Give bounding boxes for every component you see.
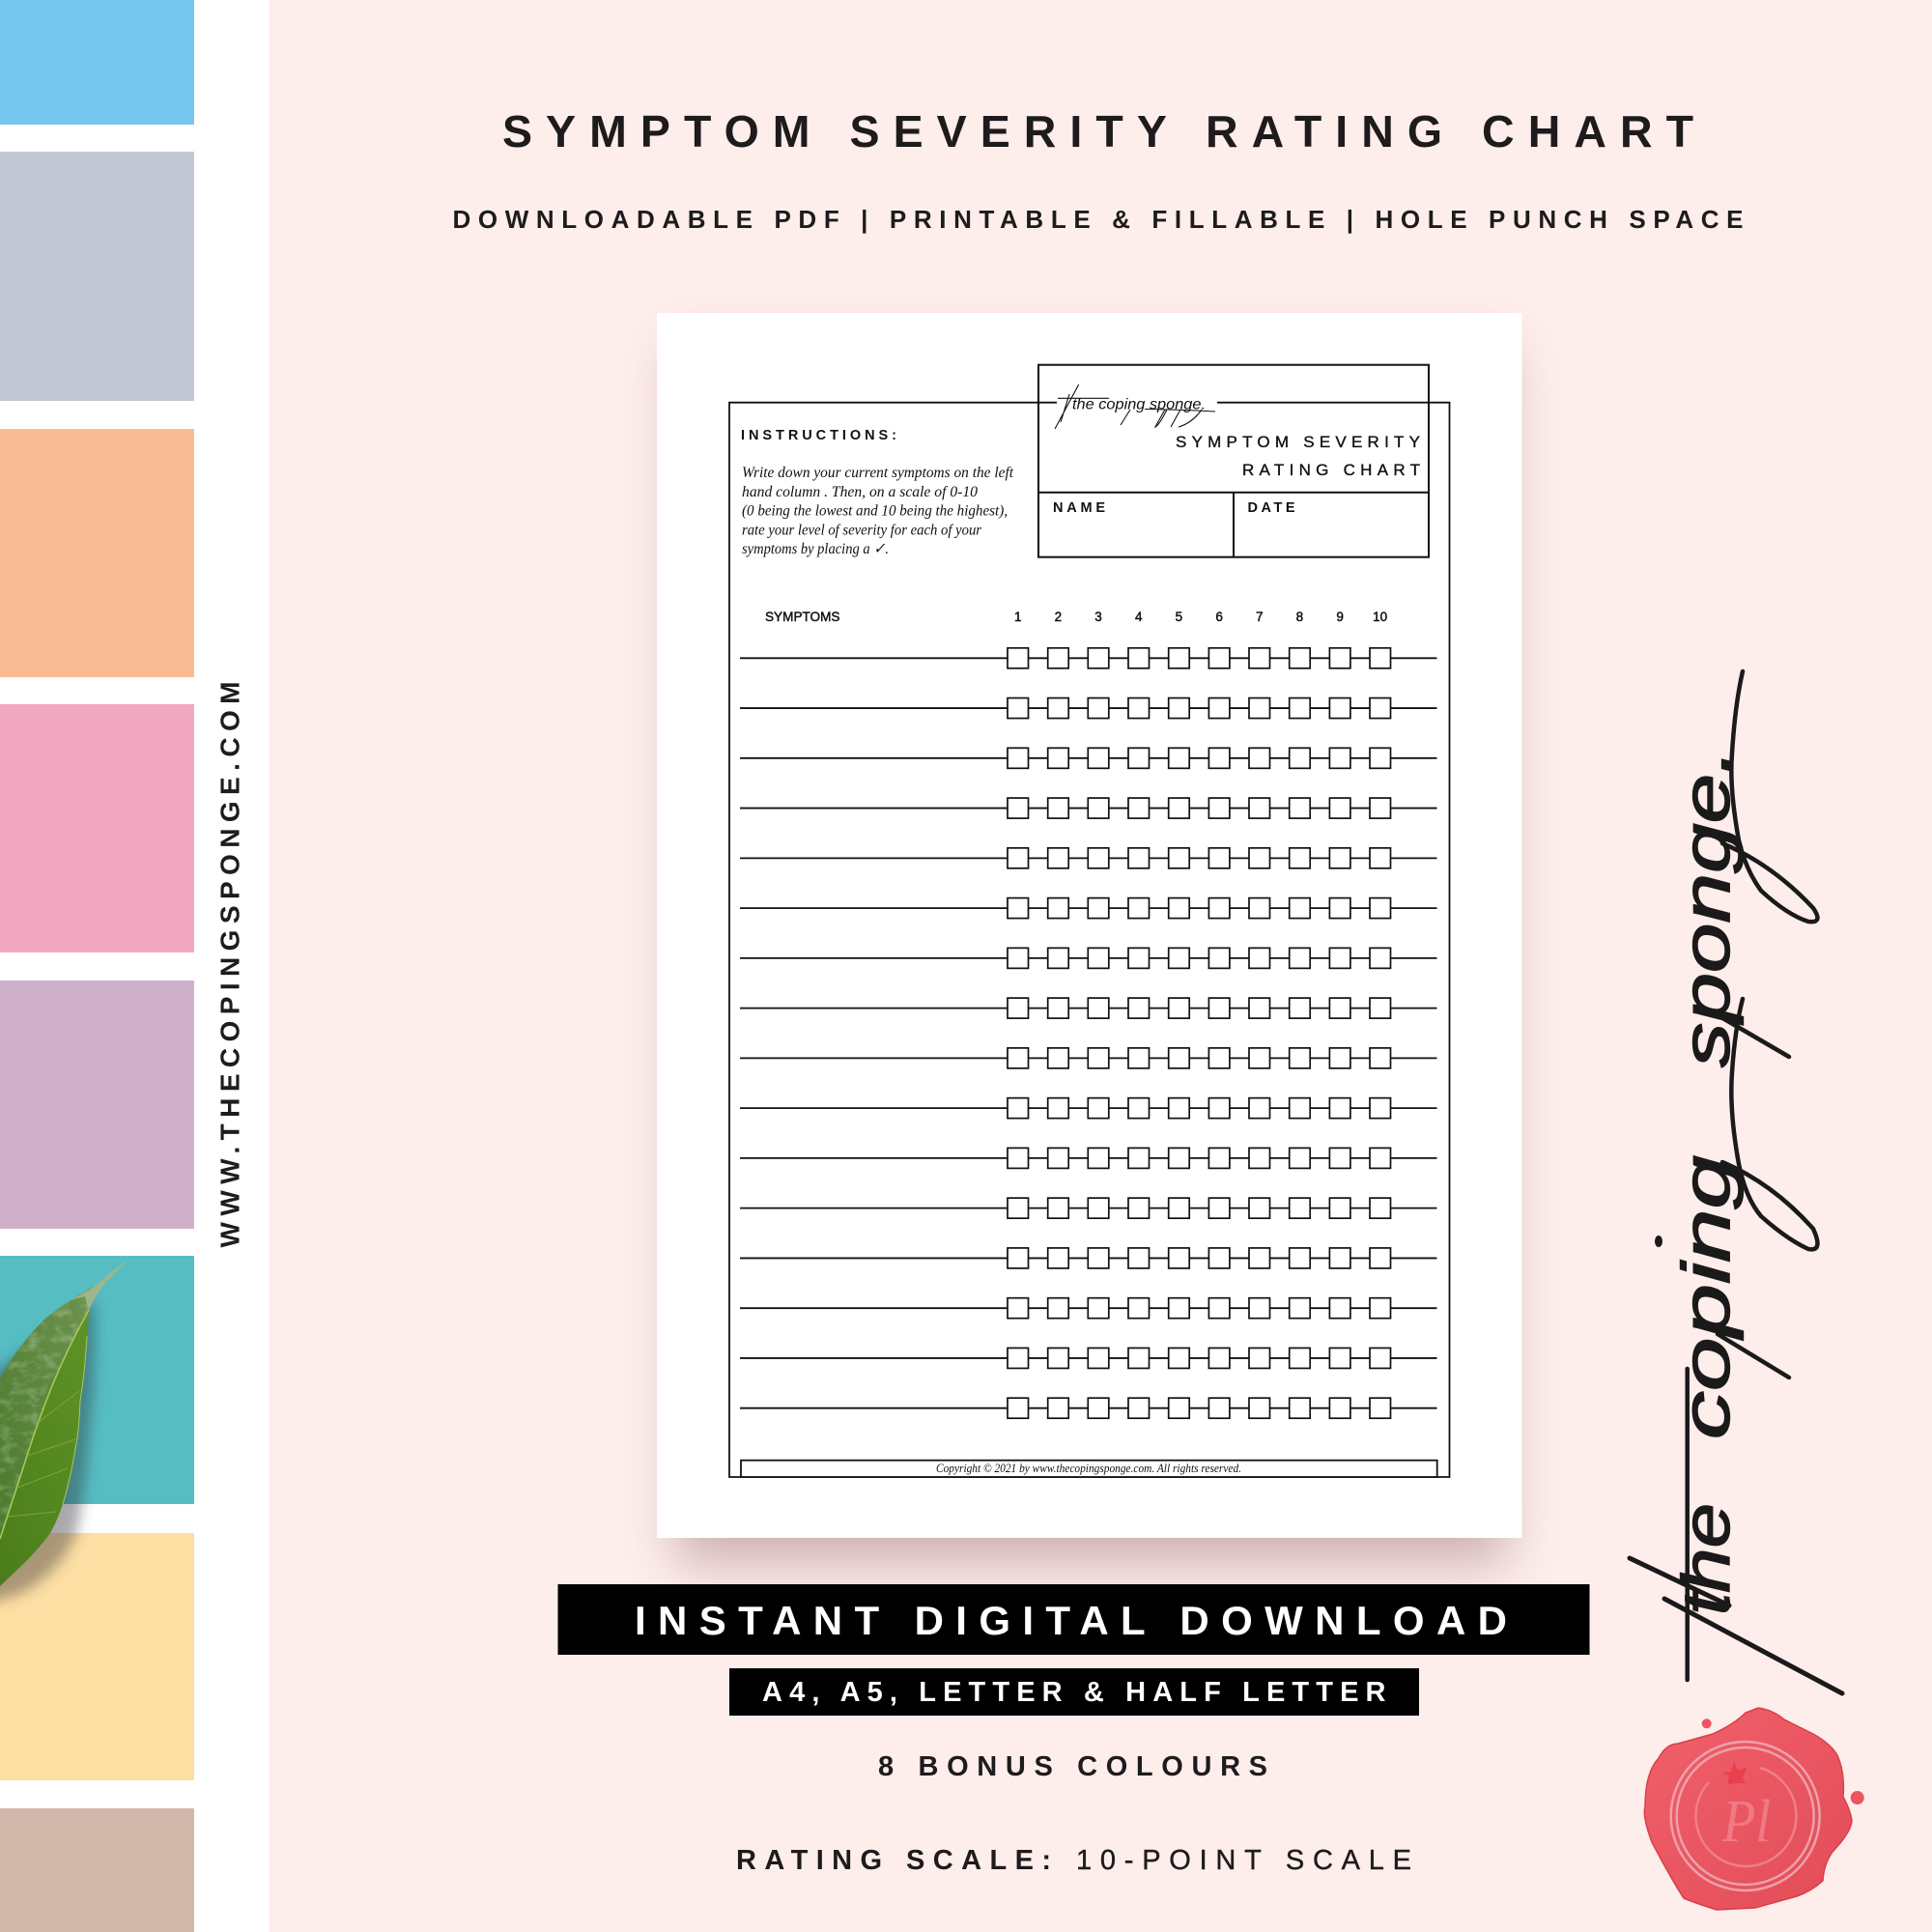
vertical website text: WWW.THECOPINGSPONGE.COM (214, 682, 244, 1248)
banner: paper sizes (729, 1668, 1419, 1716)
icon: leaf (0, 1259, 129, 1586)
icon: leaf shadow (0, 1299, 95, 1605)
text: rating scale: RATING SCALE: (736, 1845, 1051, 1876)
instructions text (742, 465, 1014, 557)
column headers: 9 (1336, 610, 1344, 624)
logo: small script mark (1055, 384, 1215, 429)
text: bonus colours: 8 BONUS COLOURS (878, 1751, 1267, 1782)
column headers: 4 (1135, 610, 1143, 624)
paper shadow (676, 348, 1507, 1563)
swatch: blue (0, 0, 194, 125)
wax body (1644, 1708, 1852, 1910)
text: rating scale (736, 1845, 1411, 1876)
swatch: grey (0, 152, 194, 401)
banner: instant digital download (558, 1584, 1590, 1655)
column headers: 5 (1176, 610, 1182, 624)
instructions text: rate your level of severity for each of your (742, 523, 982, 539)
swatch: pink (0, 704, 194, 952)
instructions text: Write down your current symptoms on the left (742, 465, 1014, 481)
column headers: SYMPTOMS (765, 610, 840, 624)
copyright box: Copyright © 2021 by www.thecopingsponge.com. All rights reserved. (936, 1462, 1241, 1475)
column headers: 6 (1215, 610, 1223, 624)
wax drops (1702, 1719, 1712, 1728)
chart name: RATING CHART (1242, 461, 1420, 479)
seal inner arc (1696, 1768, 1797, 1866)
swatch: teal (0, 1256, 194, 1504)
panel: colour swatches (0, 0, 194, 1932)
banner: paper sizes: A4, A5, LETTER & HALF LETTER (762, 1677, 1386, 1708)
sheet (657, 313, 1522, 1538)
column headers: 10 (1373, 610, 1387, 624)
swatch: yellow (0, 1533, 194, 1780)
seal star (1722, 1761, 1747, 1785)
instructions text: symptoms by placing a ✓. (742, 541, 889, 557)
chart name (1176, 433, 1420, 479)
logo: large vertical script (1630, 671, 1842, 1693)
column headers: 2 (1055, 610, 1062, 624)
instructions text: hand column . Then, on a scale of 0-10 (742, 484, 978, 500)
seal rings (1671, 1742, 1820, 1890)
logo: large vertical script: coping (1668, 1155, 1744, 1439)
icon: wax seal (1644, 1708, 1864, 1910)
name field label: NAME (1053, 500, 1105, 516)
title: SYMPTOM SEVERITY RATING CHART (502, 106, 1693, 156)
panel: printable chart sheet (657, 313, 1522, 1538)
logo: large vertical script: sponge. (1668, 749, 1744, 1067)
logo: large vertical script: the (1668, 1503, 1744, 1615)
column headers (765, 610, 1387, 624)
copyright box (741, 1461, 1437, 1477)
swatch: orange (0, 429, 194, 677)
seal monogram: Pl (1721, 1789, 1771, 1855)
swatch: brown (0, 1808, 194, 1932)
instructions text: (0 being the lowest and 10 being the highest), (742, 503, 1008, 520)
column headers: 3 (1094, 610, 1102, 624)
banner: instant digital download: INSTANT DIGITAL DOWNLOAD (635, 1598, 1507, 1643)
text: rating scale: 10-POINT SCALE (1076, 1845, 1411, 1876)
rating rows (740, 648, 1437, 1418)
swatch: purple (0, 980, 194, 1229)
date field label: DATE (1248, 500, 1295, 516)
column headers: 1 (1014, 610, 1021, 624)
logo: small script mark: the coping sponge. (1072, 396, 1206, 413)
chart frame (729, 403, 1449, 1477)
instructions heading: INSTRUCTIONS: (741, 428, 896, 443)
chart name: SYMPTOM SEVERITY (1176, 433, 1420, 451)
column headers: 8 (1296, 610, 1303, 624)
subtitle: DOWNLOADABLE PDF | PRINTABLE & FILLABLE | HOLE PUNCH SPACE (452, 205, 1743, 234)
column headers: 7 (1256, 610, 1263, 624)
header box (1038, 365, 1429, 557)
